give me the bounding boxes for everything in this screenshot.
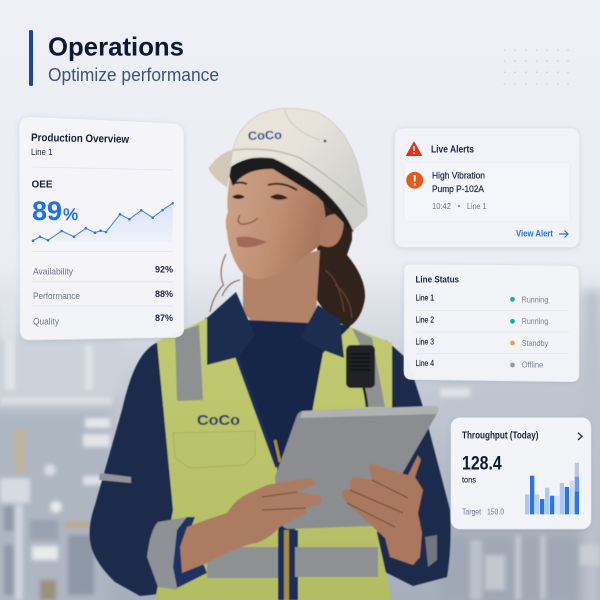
bar chart xyxy=(525,463,579,514)
throughput heading: Throughput (Today) xyxy=(462,430,538,441)
alert detail box: 10:42 xyxy=(432,201,451,211)
face xyxy=(226,160,344,279)
collar xyxy=(207,292,344,365)
metrics list: 87% xyxy=(155,313,173,323)
panel heading: Production Overview xyxy=(31,132,130,146)
hard hat xyxy=(209,108,367,230)
right cuff patch xyxy=(425,535,437,567)
left sleeve xyxy=(90,342,215,596)
status rows: Line 4 xyxy=(416,359,434,368)
metrics list: Performance xyxy=(33,291,80,301)
right forearm and hand xyxy=(341,455,423,565)
OEE value: 89% xyxy=(32,196,78,226)
metrics list xyxy=(33,264,173,326)
alert detail box xyxy=(404,162,570,222)
title block xyxy=(29,30,219,86)
vest placket and zipper xyxy=(237,357,298,600)
status rows: Line 2 xyxy=(416,315,434,324)
eyes xyxy=(232,194,288,200)
vest logo: CoCo xyxy=(197,412,240,429)
status rows xyxy=(416,294,548,369)
mouth xyxy=(236,237,267,247)
status rows: Offline xyxy=(522,360,544,369)
metrics list: 92% xyxy=(155,264,173,274)
unit: tons xyxy=(462,474,476,484)
icon: alert circle xyxy=(406,172,423,189)
metrics list: 88% xyxy=(155,289,173,299)
alert detail box: Line 1 xyxy=(467,201,487,211)
neck xyxy=(243,250,320,355)
hat band xyxy=(227,157,360,232)
worker in hard hat and hi-vis vest holding a tablet xyxy=(90,108,451,600)
left forearm and hand xyxy=(180,478,322,573)
view alert link: View Alert xyxy=(516,229,553,239)
vest right panel xyxy=(295,327,392,600)
panel: live alerts xyxy=(394,128,580,248)
left cuff xyxy=(147,517,207,590)
ear xyxy=(320,214,344,247)
alert detail box: High Vibration xyxy=(432,171,485,182)
status rows: Running xyxy=(522,295,548,304)
panel: line status xyxy=(404,264,579,382)
vest pocket xyxy=(173,431,255,468)
throughput value: 128.4 xyxy=(462,453,502,474)
target xyxy=(462,507,504,517)
metrics list: Availability xyxy=(33,266,73,276)
status rows: Standby xyxy=(522,339,548,348)
dark shirt xyxy=(205,318,350,600)
line label: Line 1 xyxy=(31,147,52,157)
icon: chevron xyxy=(578,433,582,440)
sleeve reflective band xyxy=(99,473,131,483)
reflective straps xyxy=(175,325,385,578)
OEE line chart xyxy=(32,202,174,242)
icon: warning triangle xyxy=(406,142,422,156)
title block: Optimize performance xyxy=(48,65,219,85)
hair and ponytail xyxy=(210,180,365,326)
status rows: Running xyxy=(522,317,548,326)
target: Target xyxy=(462,507,482,517)
target: 150.0 xyxy=(487,507,504,517)
alert detail box: Pump P-102A xyxy=(432,184,485,195)
status heading: Line Status xyxy=(416,275,459,286)
vest left panel xyxy=(155,318,280,600)
tablet xyxy=(275,406,438,529)
status rows: Line 1 xyxy=(416,294,434,303)
decorative dot grid xyxy=(504,49,569,85)
right sleeve xyxy=(372,340,451,586)
alerts heading: Live Alerts xyxy=(431,144,474,155)
nose xyxy=(238,215,258,224)
hard hat: CoCo xyxy=(248,128,282,143)
eyebrows xyxy=(232,182,297,190)
OEE label: OEE xyxy=(32,178,52,190)
panel: production overview xyxy=(19,116,184,340)
radio on strap xyxy=(346,345,375,407)
status rows: Line 3 xyxy=(416,337,434,346)
metrics list: Quality xyxy=(33,316,59,326)
title block: Operations xyxy=(48,32,184,62)
panel: throughput xyxy=(451,418,591,529)
